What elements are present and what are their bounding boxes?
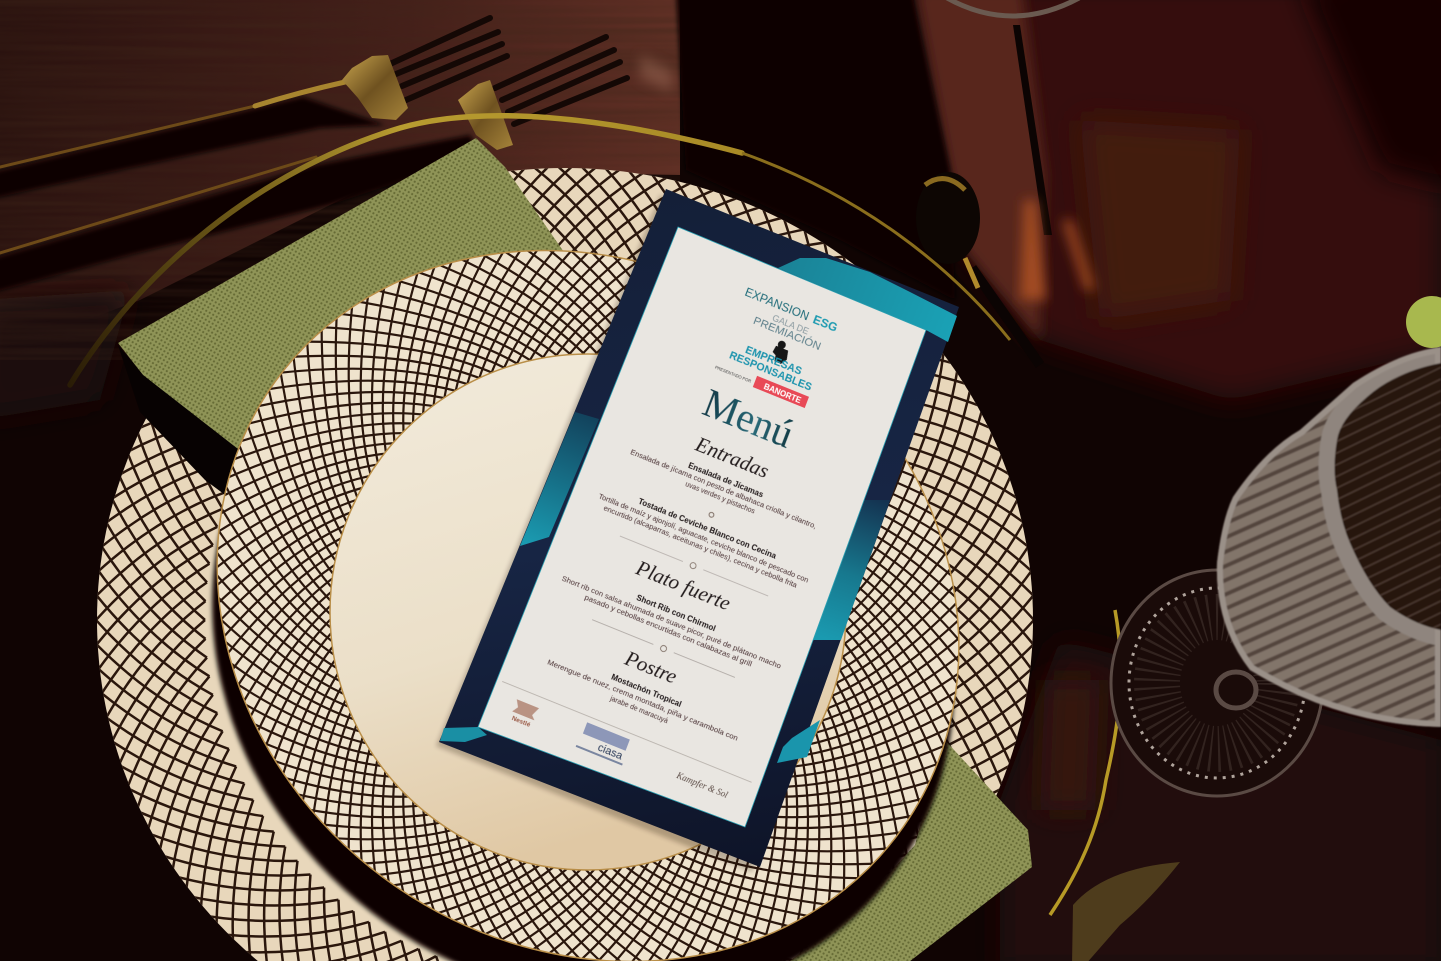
Postre heading: Postre <box>621 646 680 689</box>
glass interior <box>1334 362 1441 630</box>
ribbed wine glass <box>1216 346 1441 728</box>
logo: Expansión ESG: ESG <box>811 312 839 335</box>
dish: Short Rib: Short rib con salsa ahumada de suave picor, puré de plátano macho <box>561 576 782 671</box>
menu card <box>439 189 959 867</box>
dish: Ensalada de Jícamas: Ensalada de jícama con pesto de albahaca criolla y cilantro, <box>629 449 817 531</box>
dish: Ensalada de Jícamas: Ensalada de Jícamas <box>687 461 765 500</box>
dish: Mostachón Tropical: jarabe de maracuyá <box>608 695 669 725</box>
Plato fuerte heading: Plato fuerte <box>632 555 734 615</box>
sponsor: Ciasa <box>576 722 632 765</box>
dish: Ensalada de Jícamas: uvas verdes y pistachos <box>684 481 756 516</box>
teal wave: right lower <box>813 500 890 640</box>
fork shadows <box>0 97 480 292</box>
Menú title: Menú <box>697 380 800 457</box>
sponsor: signature: Kampfer & Sol <box>674 770 730 800</box>
Empresas Responsables: RESPONSABLES <box>728 349 813 394</box>
dish: Tostada de Ceviche: encurtido (alcaparras, aceitunas y chiles), cecina y cebolla frita <box>602 505 798 590</box>
teal wave: bottom right <box>777 720 820 763</box>
forks <box>0 18 627 253</box>
dish: Tostada de Ceviche: Tortilla de maíz y ajonjolí, aguacate, ceviche blanco de pescado con <box>597 493 809 585</box>
wine glass base <box>1110 569 1324 797</box>
card shadow <box>436 195 950 872</box>
logo: Expansión ESG: EXPANSION <box>743 285 811 323</box>
dish: Mostachón Tropical: Mostachón Tropical <box>610 672 683 709</box>
divider with ornament <box>619 533 769 599</box>
dish: Ensalada de Jícamas <box>626 439 821 539</box>
teal wave: top right <box>778 258 957 342</box>
napkin: bottom right <box>785 738 1032 961</box>
fork 2 <box>0 37 627 253</box>
Empresas Responsables: EMPRESAS <box>744 344 803 378</box>
water glass rim at top <box>947 0 1079 16</box>
shadow cast by upper plate <box>73 147 1093 961</box>
green grape <box>1406 296 1441 348</box>
presented by: PRESENTADO POR <box>714 365 752 384</box>
Gala de Premiación: GALA DE <box>771 313 810 337</box>
sponsor: Nestlé <box>509 699 539 730</box>
card paper <box>478 227 926 827</box>
gold leaf <box>1072 862 1180 961</box>
dish: Mostachón Tropical: Merengue de nuez, crema montada, piña y carambola con <box>546 659 739 743</box>
dish: Mostachón Tropical <box>543 648 743 752</box>
Gala de Premiación: PREMIACIÓN <box>751 314 823 353</box>
Entradas heading: Entradas <box>691 431 772 483</box>
dish: Short Rib: pasado y cebollas encurtidas con calabazas al grill <box>583 594 753 669</box>
teal wave: left <box>520 412 599 546</box>
divider with ornament <box>591 617 736 680</box>
dish: Tostada de Ceviche: Tostada de Ceviche Blanco con Cecina <box>637 497 778 561</box>
card border <box>439 189 959 867</box>
sponsor: Ciasa: ciasa <box>596 742 625 763</box>
plate well <box>330 354 846 870</box>
teal wave: bottom left <box>440 727 487 742</box>
gold spoon <box>916 172 1040 365</box>
napkin: top left <box>118 138 566 500</box>
ornament ring <box>708 512 715 518</box>
upper patterned plate <box>216 250 960 961</box>
dish: Short Rib <box>557 564 786 679</box>
dish: Short Rib: Short Rib con Chirmol <box>635 593 717 633</box>
Banorte logo: BANORTE <box>762 382 803 405</box>
gold charger rim <box>70 116 1121 915</box>
logo: Expansión ESG <box>743 285 839 335</box>
icon: award figure <box>770 339 792 365</box>
sponsor: Nestlé: Nestlé <box>511 715 532 729</box>
dish: Tostada de Ceviche <box>594 482 814 593</box>
Banorte logo <box>753 376 809 408</box>
printed menu content <box>490 252 916 814</box>
lower patterned plate <box>97 168 1033 961</box>
fork 1 <box>0 18 507 167</box>
